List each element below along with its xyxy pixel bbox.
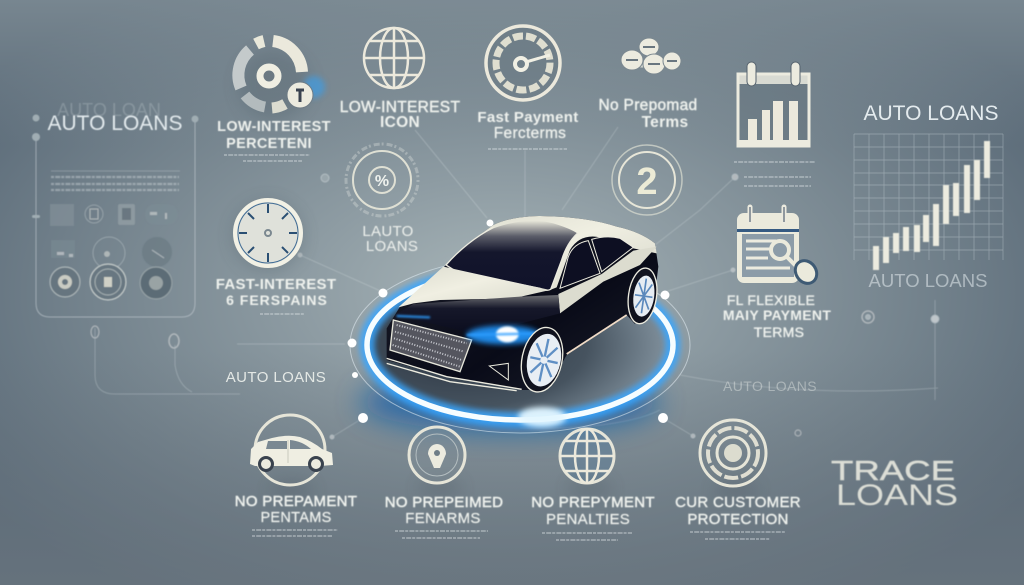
heading: flexible terms: MAIY PAYMENT bbox=[723, 307, 831, 323]
heading: no prepayment 3: NO PREPYMENT bbox=[531, 494, 655, 511]
text: greeked caption 8 bbox=[690, 532, 785, 539]
icon: coins bbox=[621, 38, 681, 74]
icon: percent dial bbox=[346, 144, 418, 216]
heading: low-interest icon bbox=[340, 99, 460, 131]
car roof bbox=[446, 216, 657, 290]
text: greeked caption 4 bbox=[260, 313, 305, 315]
icon: globe bbox=[364, 28, 424, 88]
heading: no prepayment 1 bbox=[235, 493, 357, 526]
label: auto loans left: AUTO LOANS bbox=[226, 369, 326, 386]
heading: fast-interest: 6 FERSPAINS bbox=[226, 292, 328, 308]
rear wheel bbox=[625, 266, 660, 326]
windshield edge bbox=[446, 227, 577, 290]
panel frame bbox=[36, 120, 195, 317]
heading: customer protection bbox=[675, 494, 801, 528]
icon: bottom car bbox=[250, 415, 333, 485]
heading: customer protection: PROTECTION bbox=[687, 511, 789, 528]
text: greeked caption 7 bbox=[542, 533, 632, 540]
heading: no prepaid terms bbox=[599, 97, 697, 131]
panel title: AUTO LOANS bbox=[48, 112, 182, 135]
heading: flexible terms bbox=[723, 292, 831, 340]
heading: low-interest percent: PERCETENI bbox=[226, 136, 312, 152]
heading: fast payment: Fast Payment bbox=[477, 109, 579, 126]
chart: rising bars on grid bbox=[854, 134, 1003, 270]
door stripe bbox=[558, 247, 657, 313]
heading: auto loans center: LOANS bbox=[366, 238, 418, 255]
heading: auto loans center bbox=[362, 223, 418, 255]
hood bbox=[398, 267, 550, 307]
text: greeked caption 3 bbox=[734, 162, 815, 186]
heading: no prepayment 2: NO PREPEIMED bbox=[385, 494, 503, 511]
icon: low-interest donut bbox=[238, 41, 325, 121]
icon: bottom target bbox=[700, 420, 766, 486]
heading: customer protection: CUR CUSTOMER bbox=[675, 494, 801, 511]
hood lower bbox=[395, 295, 560, 333]
shadows under bottom labels bbox=[270, 478, 758, 500]
panel greeked text bbox=[51, 171, 180, 190]
logo: trace loans bbox=[831, 455, 958, 512]
panel title bbox=[48, 100, 182, 135]
icon: calendar chart bbox=[737, 62, 810, 147]
panel title: AUTO LOAN bbox=[57, 100, 161, 120]
car bbox=[387, 216, 660, 396]
car body bbox=[387, 216, 658, 390]
icon: gauge bbox=[486, 26, 560, 100]
heading: no prepayment 1: NO PREPAMENT bbox=[235, 493, 357, 510]
heading: right auto loans: AUTO LOANS bbox=[864, 102, 998, 125]
heading: low-interest percent: LOW-INTEREST bbox=[217, 119, 331, 135]
icon: number 2 badge bbox=[612, 145, 682, 215]
icon: percent dial: % bbox=[375, 173, 389, 190]
front bumper bbox=[387, 358, 522, 391]
icon: clock bbox=[232, 200, 304, 272]
icon: number 2 badge: 2 bbox=[636, 161, 658, 203]
heading: flexible terms: FL FLEXIBLE bbox=[727, 292, 815, 308]
text: greeked caption 2 bbox=[488, 148, 567, 150]
heading: fast-interest bbox=[216, 276, 336, 308]
heading: fast payment: Fercterms bbox=[494, 125, 566, 142]
heading: fast-interest: FAST-INTEREST bbox=[216, 276, 336, 293]
heading: fast payment bbox=[477, 109, 579, 142]
icon: bottom light bulb bbox=[409, 427, 465, 483]
sill bbox=[567, 315, 627, 354]
heading: no prepayment 3: PENALTIES bbox=[546, 511, 630, 528]
label: auto loans right: AUTO LOANS bbox=[723, 378, 817, 394]
heading: flexible terms: TERMS bbox=[754, 324, 804, 340]
connector lines bbox=[91, 127, 939, 439]
text: greeked caption 1 bbox=[224, 155, 310, 161]
text: greeked caption 5 bbox=[252, 530, 338, 536]
grille bbox=[390, 320, 472, 372]
icon: flexible calendar bbox=[737, 207, 821, 288]
heading: auto loans center: LAUTO bbox=[362, 223, 414, 240]
heading: low-interest icon: ICON bbox=[380, 114, 420, 131]
headlight glow bbox=[397, 316, 547, 344]
panel: left auto loans card bbox=[32, 100, 198, 317]
label: chart auto loans: AUTO LOANS bbox=[869, 270, 987, 291]
panel large round icons bbox=[50, 264, 172, 300]
front wheel bbox=[516, 324, 568, 396]
panel small icons bbox=[50, 204, 178, 269]
heading: no prepaid terms: No Prepomad bbox=[599, 97, 697, 114]
panel dots bbox=[32, 114, 198, 218]
logo: trace loans: TRACE bbox=[831, 455, 955, 486]
heading: no prepayment 2 bbox=[385, 494, 503, 527]
heading: no prepayment 2: FENARMS bbox=[405, 510, 481, 527]
logo: trace loans: LOANS bbox=[836, 479, 958, 512]
icon: bottom globe bbox=[560, 429, 614, 483]
heading: no prepaid terms: Terms bbox=[642, 114, 688, 131]
side windows bbox=[560, 237, 633, 288]
text: greeked caption 6 bbox=[395, 531, 488, 538]
glowing ring bbox=[348, 220, 690, 433]
heading: low-interest icon: LOW-INTEREST bbox=[340, 99, 460, 116]
heading: no prepayment 3 bbox=[531, 494, 655, 528]
windshield bbox=[446, 221, 577, 290]
heading: low-interest percent bbox=[217, 119, 331, 152]
heading: no prepayment 1: PENTAMS bbox=[260, 510, 332, 526]
